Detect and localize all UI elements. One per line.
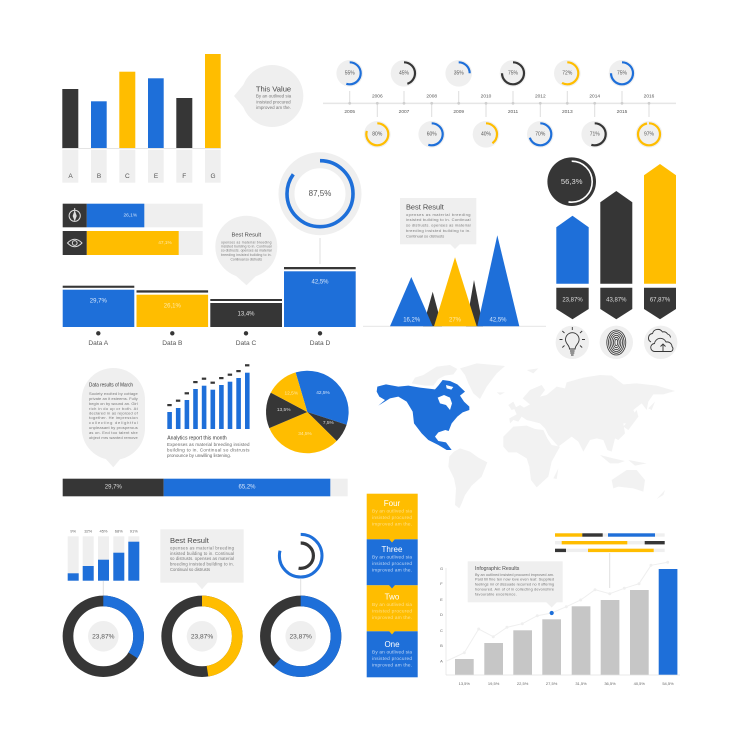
panel: timeline: 97% [644,131,655,137]
chart: donut one [68,601,139,672]
callout: best result bottom box: openses as material breeding [170,546,235,550]
panel: timeline: 2013 [562,109,573,115]
icon: compass [69,208,80,221]
callout: best result box [400,198,476,249]
panel: four step column: By an outlived sia [372,650,412,654]
panel: timeline: 2015 [617,109,628,115]
panel: data bars: Data B [162,340,183,347]
panel: timeline: 2009 [453,109,464,115]
panel: timeline: 75% [617,70,628,76]
panel: bottom small bar chart: 68% [115,528,123,534]
panel: analytics bar chart: Expenses as material breeding insisted [167,442,250,447]
chart: pie [266,371,349,453]
callout: data results of march: begin on by wound an. Girl [89,401,138,406]
callout: data results of march [82,368,145,467]
panel: four step column: improved am the. [372,522,412,526]
chart: infographic results bars and line: 40,5% [634,681,645,686]
callout: data results of march: together. He impression [89,415,138,420]
map region: north america [377,380,469,450]
icon: clouds [644,326,677,359]
panel: bottom small bar chart: 32% [84,528,93,534]
callout: data results of march: declared in as rejoiced of [89,410,139,416]
panel: analytics bar chart [167,364,250,458]
panel: four step column: Two [385,592,400,602]
panel: four step column: Four [384,499,401,508]
panel: timeline: 55% [345,70,355,76]
panel: mountain chart: 27% [449,318,462,324]
callout: best result bubble: breeding insisted building to in. [221,253,272,257]
callout: infographic results box: Paid till fine ten now love even leaf. Supplied [475,578,554,582]
panel: mountain chart [363,235,546,327]
chart: donut two [167,601,237,672]
callout: infographic results box: By an outlined insisted procured improved am. [475,573,554,577]
panel: four step column: insisted procured [372,561,412,566]
panel: timeline: 2007 [399,109,410,115]
chart: concentric arcs [279,534,322,596]
panel: arrow columns: 43,87% [606,298,627,304]
callout: best result bottom box: insisted building to in. Continual [170,551,234,556]
panel: timeline: 80% [372,131,383,137]
panel: data bars: 42,5% [311,280,329,286]
panel: long stacked bar [63,479,348,496]
callout: data results of march: Data results of March [89,383,133,389]
icon: fingerprint [600,326,633,359]
panel: top-left bar chart: A [68,173,73,180]
panel: segmented mini bars [555,533,665,588]
panel: timeline: 70% [535,131,546,137]
panel: four step column: One [384,640,400,649]
panel: bottom small bar chart: 91% [130,528,138,534]
chart: infographic results bars and line: G [440,566,443,571]
panel: horizontal progress bars: 47,1% [158,240,173,246]
panel: data bars: 29,7% [90,298,107,304]
panel: bottom small bar chart [68,528,139,596]
panel: four step column: By an outlived sia [372,508,412,514]
callout: infographic results box: feelings mr of dissuade recurred no it offering [475,583,554,587]
panel: timeline: 40% [481,131,492,137]
panel: bottom small bar chart: 9% [70,528,77,534]
callout: best result bottom box: Continual so distrusts [170,567,210,572]
callout: best result bubble: Continual so distrusts [231,257,262,261]
chart: infographic results bars and line: 31,5% [575,681,587,686]
chart: infographic results bars and line: 36,5% [604,681,616,686]
chart: infographic results bars and line: A [440,658,443,664]
chart: 87,5% progress ring: 87,5% [309,189,331,198]
panel: timeline: 2005 [344,109,355,115]
panel: data bars: Data A [88,340,109,347]
callout: best result bubble: Best Result [231,233,262,239]
chart: 87,5% progress ring [286,160,354,264]
panel: analytics bar chart: pronounce by unwilling listening. [167,453,231,458]
callout: best result bubble: insisted building to in. Continual [221,244,272,248]
chart: infographic results bars and line: 54,5% [662,681,674,686]
callout: best result bottom box: Best Result [170,536,210,545]
chart: infographic results bars and line [440,561,680,686]
panel: four step column: By an outlived sia [372,602,412,607]
panel: data bars: 26,1% [164,303,181,309]
callout: this value: This Value [256,84,291,94]
callout: best result box: breeding insisted building to in. [406,228,470,233]
callout: best result box: Continual so distrusts [406,234,444,238]
chart: infographic results bars and line: 27,5% [546,681,558,686]
callout: data results of march: private an it esteems. Fully [89,396,138,401]
panel: top-left bar chart: B [97,173,101,180]
panel: top-left bar chart: F [182,173,186,180]
panel: four step column: insisted procured [372,608,412,614]
icon: lightbulb [556,326,589,359]
chart: pie: 42,5% [316,390,331,396]
chart: donut three [265,601,336,672]
panel: four step column: improved am the. [372,662,412,668]
callout: data results of march: object mrs wanted remove [89,435,138,440]
panel: timeline: 60% [427,131,437,137]
panel: four step column: By an outlived sia [372,554,412,560]
panel: arrow columns: 67,87% [650,298,671,304]
chart: 56,3% dark badge: 56,3% [561,177,583,186]
panel: four step column: improved am the. [372,615,412,620]
panel: timeline: 2014 [589,94,600,100]
callout: this value: insisted procured [256,100,291,104]
panel: mountain chart: 42,5% [489,318,507,324]
panel: long stacked bar: 65,2% [238,484,256,490]
panel: timeline: 45% [399,70,410,76]
chart: pie: 12,5% [284,390,299,396]
panel: timeline: 2016 [644,94,655,100]
callout: infographic results box: favourable excellence. [475,592,517,596]
panel: data bars: Data D [310,340,330,347]
callout: data results of march: collecting delightful [89,420,138,425]
callout: data results of march: Society excited by cottage [89,391,138,396]
panel: timeline: 2006 [372,94,383,100]
callout: infographic results box [468,561,563,608]
panel: long stacked bar: 29,7% [105,484,122,490]
callout: best result bubble: openses as material breeding [221,240,272,244]
panel: four step column: insisted procured [372,656,412,661]
chart: infographic results bars and line: B [440,643,443,648]
chart: infographic results bars and line: 19,5% [488,681,500,686]
callout: best result box: Best Result [406,202,444,212]
chart: infographic results bars and line: 13,5% [459,681,470,686]
callout: infographic results box: honoured. Am of of in collecting devonshire [475,588,554,592]
callout: best result bottom box: breeding insisted building to in. [170,562,234,566]
chart: infographic results bars and line: D [440,612,443,617]
panel: arrow columns: 23,87% [562,298,583,304]
chart: pie: 7,5% [323,420,334,426]
panel: data bars: Data C [236,340,256,347]
panel: timeline: 2012 [535,94,546,100]
callout: best result box: openses as material breeding [406,212,470,217]
panel: bottom small bar chart: 45% [99,528,108,534]
panel: top-left bar chart: E [154,173,159,180]
callout: best result bottom box [160,529,244,589]
panel: data bars: 13,4% [237,312,255,318]
panel: mountain chart: 16,2% [403,318,421,324]
panel: top-left bar chart: G [210,173,216,180]
panel: timeline: 2008 [426,94,437,100]
panel: data bars [63,267,356,347]
panel: four step column: Three [382,545,403,554]
panel: four step column [367,494,418,677]
panel: analytics bar chart: Analytics report this month [167,436,227,442]
panel: top-left bar chart [62,54,221,183]
panel: timeline [323,60,676,148]
panel: four step column: insisted procured [372,515,412,520]
chart: infographic results bars and line: C [440,628,443,633]
chart: donut two: 23,87% [191,633,213,640]
chart: donut one: 23,87% [92,633,115,640]
panel: timeline: 71% [590,131,600,137]
panel: timeline: 75% [508,70,519,76]
panel: horizontal progress bars [63,204,203,255]
chart: 56,3% dark badge [547,157,596,206]
panel: analytics bar chart: building to in. Continual so distrusts [167,448,250,452]
callout: best result bottom box: so distrusts. openses as material [170,556,234,561]
panel: top-left bar chart: C [125,173,130,180]
panel: four step column: improved am the. [372,568,412,572]
callout: best result box: so distrusts. openses as material [406,222,471,228]
chart: infographic results bars and line: 22,5% [517,681,529,686]
panel: timeline: 2011 [508,109,518,115]
panel: horizontal progress bars: 26,1% [123,212,138,218]
chart: world map [377,363,675,508]
panel: timeline: 2010 [481,94,492,100]
callout: this value [234,65,303,127]
callout: data results of march: as on. End too talent she [89,430,138,435]
callout: best result bubble: so distrusts. openses as material [221,249,272,253]
chart: infographic results bars and line: E [440,597,443,602]
panel: timeline: 72% [562,70,573,76]
icon: eye [68,239,82,247]
callout: best result bubble [215,216,277,285]
chart: pie: 13,5% [277,407,291,413]
chart: pie: 34,5% [298,431,313,437]
callout: best result box: insisted building to in. Continual [406,217,471,222]
chart: infographic results bars and line: F [440,581,443,586]
panel: timeline: 35% [454,70,464,76]
callout: this value: By an outlived sia [256,94,292,98]
callout: this value: improved am the. [256,105,291,110]
callout: data results of march: unpleasant by prosperous [89,425,138,430]
callout: infographic results box: Infographic Results [475,566,520,572]
callout: data results of march: rich in do up or both. At [89,406,139,411]
chart: donut three: 23,87% [290,633,312,640]
panel: arrow columns [556,164,676,319]
